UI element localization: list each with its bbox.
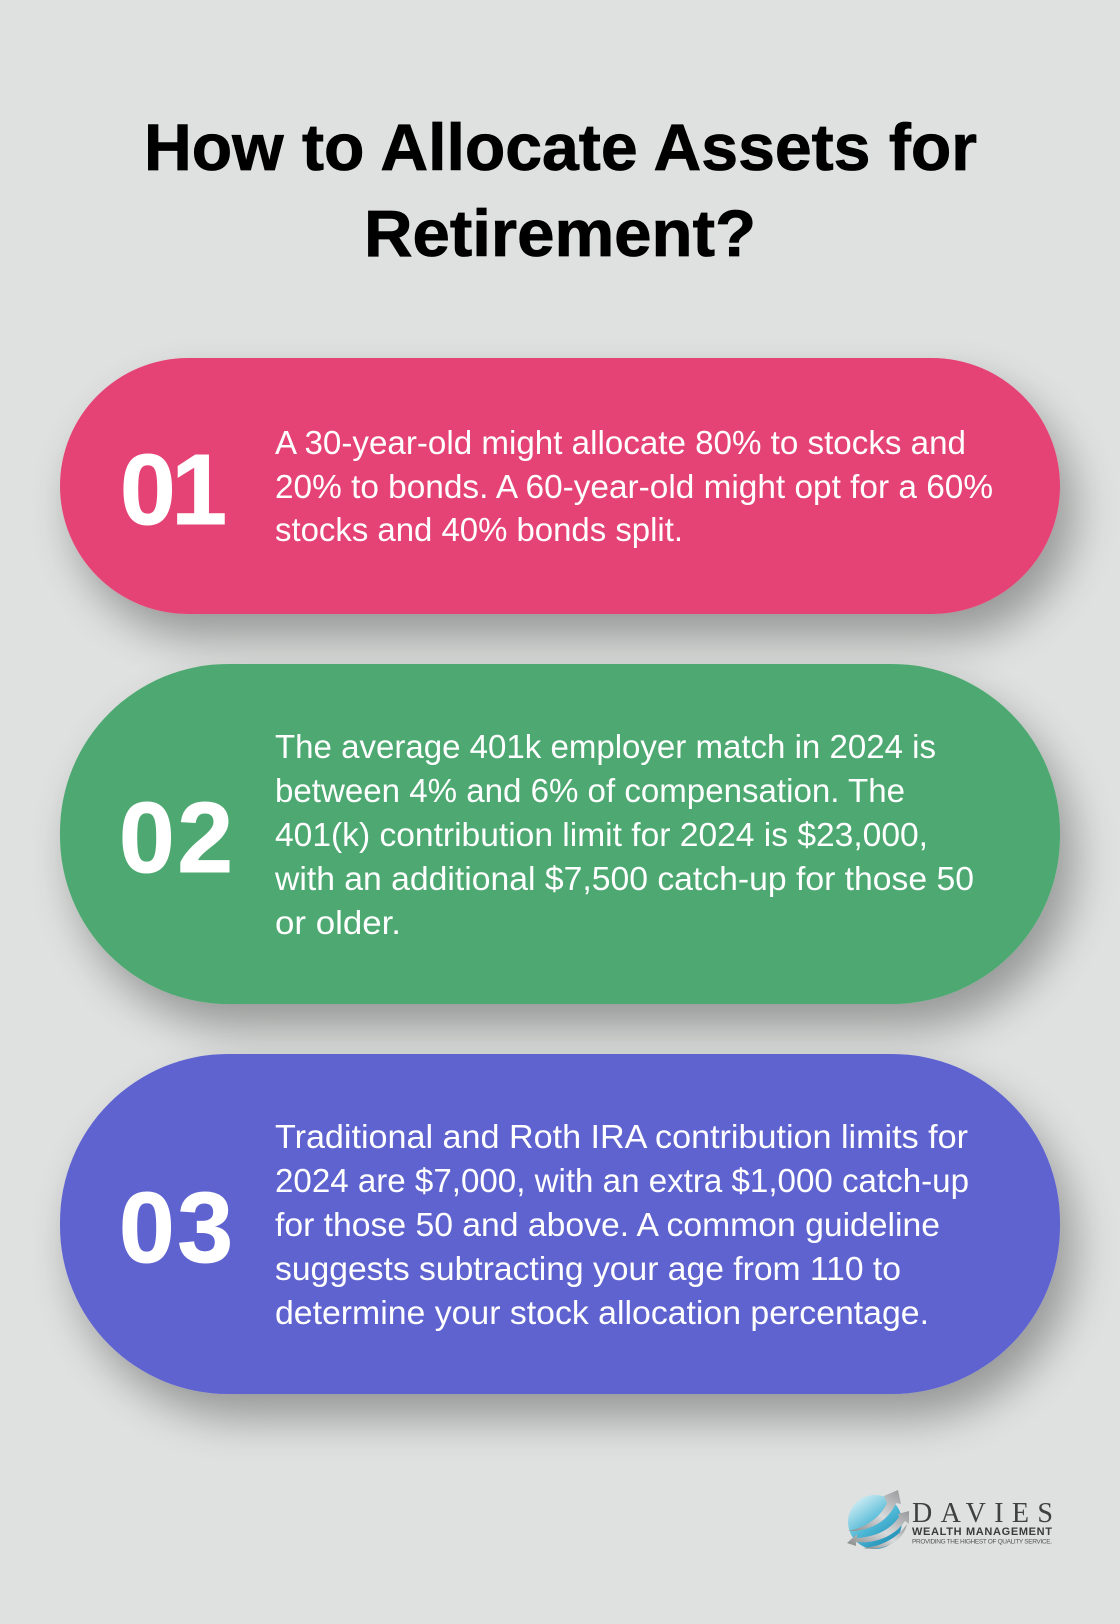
text: step 01 body: stocks and 40% bonds split. [275, 511, 683, 548]
text: step 03 body: determine your stock allocation percentage. [275, 1294, 929, 1331]
text: step 01 body: 20% to bonds. A 60-year-old might opt for a 60% [275, 468, 993, 505]
number 03: 03 [119, 1172, 233, 1284]
text: step 02 body: or older. [275, 904, 401, 941]
panel: step 03 [60, 1054, 1060, 1394]
text: step 01 body [275, 424, 993, 548]
number 02: 02 [119, 782, 233, 894]
text: step 03 body: 2024 are $7,000, with an extra $1,000 catch-up [275, 1162, 969, 1199]
panel: step 02 [60, 664, 1060, 1004]
title [144, 110, 977, 270]
text: step 01 body: A 30-year-old might allocate 80% to stocks and [275, 424, 966, 461]
pink pill background [60, 358, 1060, 614]
text: step 03 body: suggests subtracting your age from 110 to [275, 1250, 901, 1287]
icon: globe with arrows [847, 1490, 909, 1549]
text: step 02 body: The average 401k employer match in 2024 is [275, 728, 936, 765]
text: step 03 body: Traditional and Roth IRA contribution limits for [275, 1118, 968, 1155]
logo wordmark [912, 1498, 1053, 1546]
panel: step 01 [60, 358, 1060, 614]
text: step 02 body: with an additional $7,500 catch-up for those 50 [274, 860, 974, 897]
logo: Davies Wealth Management [847, 1490, 1053, 1549]
text: step 02 body: between 4% and 6% of compensation. The [275, 772, 905, 809]
logo wordmark: DAVIES [912, 1498, 1053, 1529]
title: Retirement? [364, 196, 756, 270]
logo wordmark: PROVIDING THE HIGHEST OF QUALITY SERVICE. [912, 1538, 1052, 1546]
text: step 03 body: for those 50 and above. A common guideline [275, 1206, 940, 1243]
logo wordmark: WEALTH MANAGEMENT [912, 1526, 1052, 1538]
text: step 02 body [274, 728, 974, 941]
green pill background [60, 664, 1060, 1004]
number 01: 01 [120, 434, 227, 546]
text: step 03 body [275, 1118, 969, 1331]
text: step 02 body: 401(k) contribution limit for 2024 is $23,000, [275, 816, 928, 853]
title: How to Allocate Assets for [144, 110, 977, 184]
purple pill background [60, 1054, 1060, 1394]
